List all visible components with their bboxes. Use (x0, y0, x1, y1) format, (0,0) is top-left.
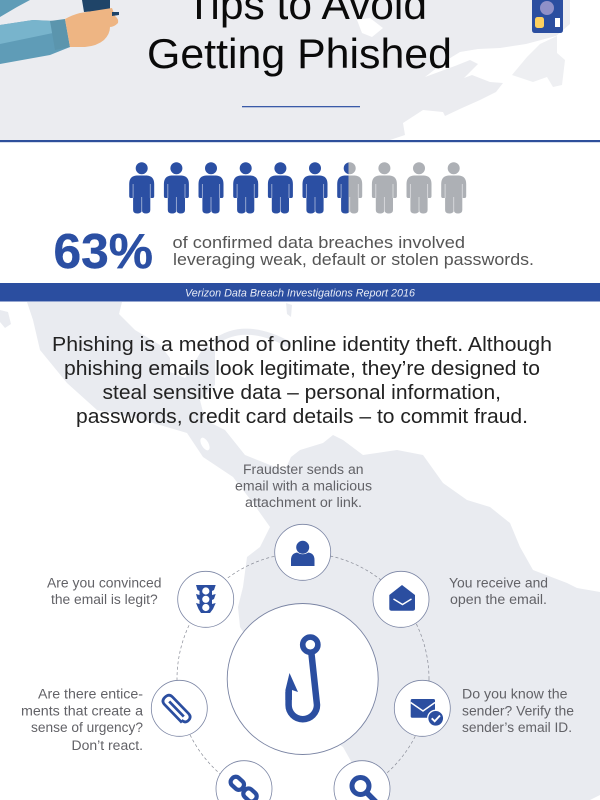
title (147, 0, 452, 77)
statistic: 63%: 63% (54, 225, 153, 279)
lower map background (0, 302, 600, 800)
statistic description: leveraging weak, default or stolen passwords. (173, 250, 534, 269)
step: enticements: Are there entice- (38, 687, 143, 702)
intro paragraph (52, 334, 552, 428)
icon: traffic light (196, 585, 216, 613)
statistic description: of confirmed data breaches involved (172, 233, 465, 252)
step: receive email: open the email. (450, 592, 547, 607)
step: inspect (334, 761, 390, 800)
step: know the sender: Do you know the (462, 687, 568, 702)
intro paragraph: passwords, credit card details – to commit fraud. (76, 406, 528, 428)
step: receive email: You receive and (449, 576, 548, 590)
step: enticements: ments that create a (21, 704, 144, 719)
header map background (0, 0, 570, 140)
step: enticements (21, 680, 207, 753)
source bar: Verizon Data Breach Investigations Report 2016 (185, 288, 416, 300)
step: fraudster: Fraudster sends an (243, 462, 364, 477)
header divider (0, 140, 600, 142)
title: Getting Phished (147, 30, 452, 77)
step: enticements: sense of urgency? (31, 720, 143, 735)
step: convinced: Are you convinced (47, 576, 162, 590)
title underline (242, 106, 360, 107)
step: know the sender: sender? Verify the (462, 704, 574, 719)
step: know the sender: sender’s email ID. (462, 720, 572, 735)
intro paragraph: steal sensitive data – personal information, (102, 382, 501, 404)
step: fraudster (235, 462, 372, 580)
step: fraudster: email with a malicious (235, 479, 372, 494)
central hook circle (227, 604, 378, 754)
intro paragraph: phishing emails look legitimate, they’re designed to (64, 358, 540, 380)
statistic description (172, 233, 534, 269)
icon: paperclip (161, 693, 192, 725)
source bar (0, 283, 600, 302)
icon: verified mail (411, 699, 444, 726)
step: know the sender (394, 680, 574, 736)
icon: magnifying glass (352, 778, 376, 800)
pictogram: 6.5 of 10 people (129, 162, 466, 214)
step: links (216, 761, 272, 800)
step: fraudster: attachment or link. (245, 495, 362, 510)
dashed cycle ring (177, 553, 429, 800)
step: convinced (47, 571, 234, 627)
icon: person (291, 541, 314, 566)
illustration: arms and hand (0, 0, 119, 64)
step: enticements: Don’t react. (72, 738, 143, 753)
icon: fish hook (285, 637, 318, 719)
icon: open envelope (389, 585, 415, 611)
intro paragraph: Phishing is a method of online identity theft. Although (52, 334, 552, 356)
icon: chain link (229, 775, 259, 800)
step: receive email (373, 571, 548, 627)
step: convinced: the email is legit? (51, 592, 158, 607)
illustration: card (532, 0, 563, 33)
